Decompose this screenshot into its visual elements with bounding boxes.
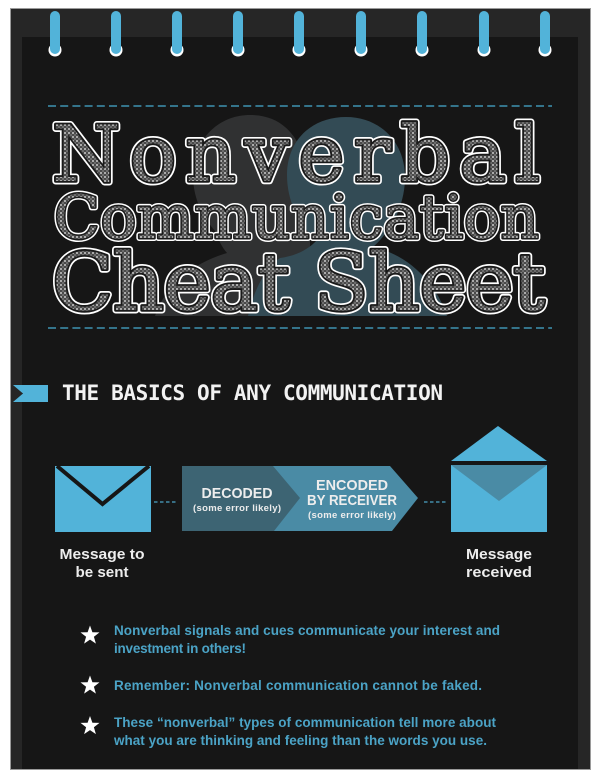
label: message to be sent: be sent	[76, 564, 129, 581]
arrow: decoded	[182, 466, 300, 531]
label: message received: Message	[466, 546, 532, 563]
icon: star 3	[80, 716, 100, 734]
arrow: encoded by receiver	[260, 466, 418, 531]
bullet text 1: Nonverbal signals and cues communicate your interest and	[114, 623, 500, 638]
icon: star 2	[80, 676, 100, 694]
bullet text 2: Remember: Nonverbal communication cannot be faked.	[114, 678, 482, 693]
arrow: decoded: DECODED	[202, 485, 273, 502]
bullet list	[80, 623, 500, 748]
section heading: THE BASICS OF ANY COMMUNICATION	[62, 381, 443, 405]
icon: open envelope	[451, 426, 547, 532]
connector right	[424, 501, 447, 503]
arrow: encoded by receiver: ENCODED	[316, 477, 388, 494]
bullet text 1	[114, 623, 500, 656]
arrow: encoded by receiver: BY RECEIVER	[307, 492, 397, 509]
title	[52, 110, 545, 329]
label: message received	[466, 546, 532, 581]
silhouette: two people	[155, 115, 447, 316]
bullet text 3	[113, 715, 496, 748]
label: message to be sent	[60, 546, 144, 581]
arrow: decoded: (some error likely)	[193, 503, 281, 514]
spiral binding rings	[48, 11, 552, 56]
icon: star 1	[80, 626, 100, 644]
icon: sealed envelope	[55, 466, 151, 532]
bullet text 3: what you are thinking and feeling than the words you use.	[113, 733, 487, 748]
dashed rules	[48, 106, 552, 328]
connector left	[154, 501, 177, 503]
label: message received: received	[466, 564, 532, 581]
arrow: encoded by receiver: (some error likely)	[308, 510, 396, 521]
section ribbon	[13, 385, 48, 402]
bullet text 3: These “nonverbal” types of communication tell more about	[114, 715, 496, 730]
label: message to be sent: Message to	[60, 546, 144, 563]
bullet text 1: investment in others!	[114, 641, 246, 656]
